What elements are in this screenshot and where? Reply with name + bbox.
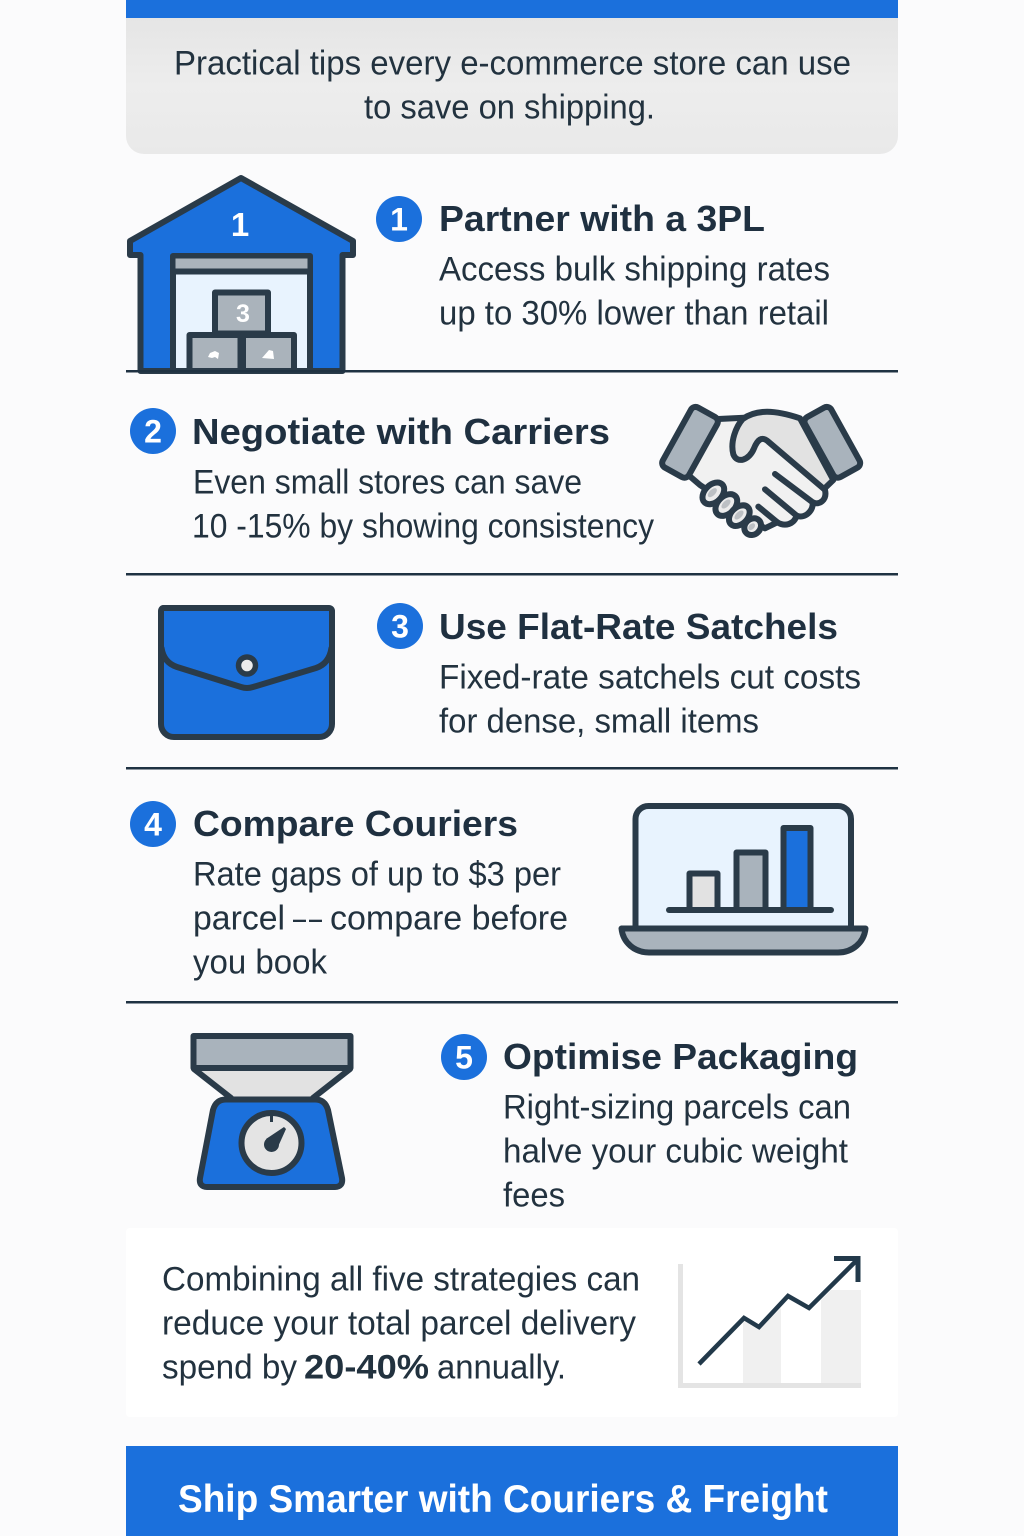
badge 1: [376, 196, 422, 242]
footer banner: Ship Smarter with Couriers & Freight: [178, 1478, 828, 1521]
tip 3 text: Fixed-rate satchels cut costs: [439, 658, 861, 696]
tip 2 text: Even small stores can save: [193, 464, 582, 502]
tip 5 text: Right-sizing parcels can: [503, 1088, 851, 1126]
tip 4 text: Rate gaps of up to $3 per: [193, 856, 561, 894]
icon: laptop with bar chart: [622, 806, 866, 952]
callout text: spend by: [162, 1348, 297, 1386]
divider 2: [126, 573, 898, 576]
tip 4 text: compare before: [330, 900, 568, 938]
tip 5 text: [441, 1034, 858, 1214]
tip 1 text: up to 30% lower than retail: [439, 294, 829, 332]
intro panel: to save on shipping.: [364, 88, 655, 126]
tip 1 text: [376, 196, 830, 332]
tip 1 text: Partner with a 3PL: [439, 198, 765, 239]
divider 3: [126, 767, 898, 770]
badge 1: 1: [390, 202, 408, 238]
tip 5 text: halve your cubic weight: [503, 1132, 849, 1170]
badge 4: 4: [144, 806, 162, 842]
callout text: Combining all five strategies can: [162, 1260, 640, 1298]
tip 3 text: [377, 603, 861, 740]
divider 1: [126, 370, 898, 372]
tip 2 text: 10 -15% by showing consistency: [192, 508, 654, 546]
callout text: annually.: [437, 1348, 566, 1386]
callout panel: [126, 1228, 898, 1417]
callout text: reduce your total parcel delivery: [162, 1304, 636, 1342]
callout text: 20-40%: [304, 1348, 429, 1386]
top accent bar: [126, 0, 898, 18]
tip 5 text: Optimise Packaging: [503, 1036, 858, 1077]
divider 4: [126, 1001, 898, 1004]
tip 4 text: parcel: [193, 900, 285, 938]
tip 2 text: Negotiate with Carriers: [192, 411, 610, 452]
icon: weighing scale: [194, 1036, 350, 1187]
badge 3: 3: [391, 608, 409, 644]
tip 4 text: Compare Couriers: [193, 803, 518, 844]
badge 4: [130, 801, 176, 847]
tip 3 text: Use Flat-Rate Satchels: [439, 606, 838, 647]
icon: warehouse: [130, 178, 353, 371]
tip 4 text: –: [309, 900, 322, 938]
footer banner: [126, 1446, 898, 1536]
icon: warehouse: 1: [231, 206, 249, 243]
badge 2: 2: [144, 414, 162, 450]
badge 5: [441, 1034, 487, 1080]
tip 2 text: [130, 408, 654, 546]
tip 1 text: Access bulk shipping rates: [439, 250, 830, 288]
icon: growth chart: [678, 1258, 861, 1388]
tip 4 text: you book: [193, 944, 328, 982]
tip 5 text: fees: [503, 1176, 565, 1214]
tip 4 text: [130, 801, 568, 982]
intro panel: Practical tips every e-commerce store can use: [174, 44, 851, 82]
icon: warehouse: 3: [236, 300, 250, 328]
badge 5: 5: [455, 1040, 473, 1076]
icon: satchel: [161, 608, 332, 737]
tip 3 text: for dense, small items: [439, 702, 759, 740]
badge 2: [130, 408, 176, 454]
badge 3: [377, 603, 423, 649]
callout text: [162, 1260, 640, 1386]
intro panel: [126, 18, 898, 154]
tip 4 text: –: [293, 900, 306, 938]
icon: handshake: [660, 405, 862, 538]
